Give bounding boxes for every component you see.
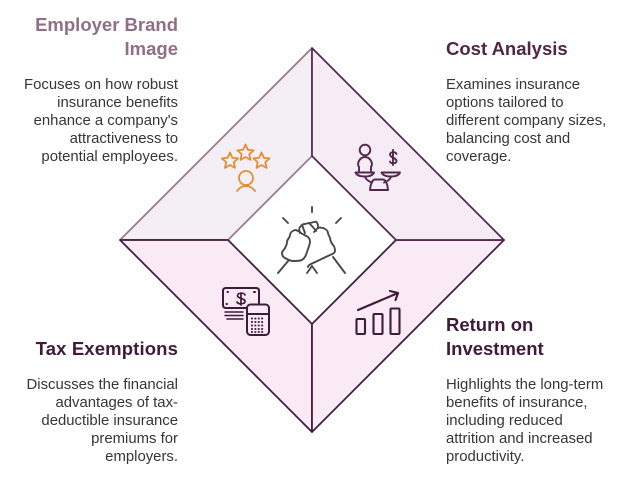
text: employer brand image: enhance a company's bbox=[34, 113, 178, 129]
text: tax exemptions bbox=[27, 377, 178, 465]
panel: tax exemptions quadrant bbox=[120, 240, 312, 432]
text: return on investment: Highlights the long-term bbox=[446, 377, 603, 393]
heading: cost analysis: Cost Analysis bbox=[446, 38, 568, 59]
text: cost analysis: options tailored to bbox=[446, 95, 564, 111]
icon: growth bars with arrow bbox=[356, 291, 400, 334]
text: return on investment: benefits of insurance, bbox=[446, 395, 588, 411]
panel: return on investment quadrant bbox=[312, 240, 504, 432]
text: employer brand image: attractiveness to bbox=[70, 131, 178, 147]
icon: scale with person and dollar bbox=[356, 145, 400, 190]
text: return on investment bbox=[446, 377, 603, 465]
heading: return on investment: Return on bbox=[446, 314, 533, 335]
text: tax exemptions: Discusses the financial bbox=[27, 377, 178, 393]
text: employer brand image: potential employees. bbox=[41, 149, 178, 165]
heading: return on investment: Investment bbox=[446, 338, 544, 359]
text: employer brand image: insurance benefits bbox=[57, 95, 178, 111]
heading: return on investment bbox=[446, 314, 544, 359]
center diamond bbox=[228, 156, 396, 324]
text: cost analysis: balancing cost and bbox=[446, 131, 570, 147]
text: tax exemptions: deductible insurance bbox=[41, 413, 178, 429]
heading: tax exemptions: Tax Exemptions bbox=[36, 338, 178, 359]
icon: money and calculator bbox=[223, 288, 269, 335]
icon: clasped hands bbox=[278, 207, 345, 273]
text: cost analysis: coverage. bbox=[446, 149, 511, 165]
text: cost analysis bbox=[446, 77, 606, 165]
heading: employer brand image bbox=[35, 14, 178, 59]
text: cost analysis: different company sizes, bbox=[446, 113, 606, 129]
text: employer brand image: Focuses on how robust bbox=[24, 77, 178, 93]
icon: stars and person bbox=[222, 144, 270, 191]
text: employer brand image bbox=[24, 77, 178, 165]
text: tax exemptions: advantages of tax- bbox=[55, 395, 178, 411]
text: tax exemptions: premiums for bbox=[91, 431, 178, 447]
panel: cost analysis quadrant bbox=[312, 48, 504, 240]
text: return on investment: including reduced bbox=[446, 413, 563, 429]
text: cost analysis: Examines insurance bbox=[446, 77, 580, 93]
text: tax exemptions: employers. bbox=[105, 449, 178, 465]
text: return on investment: attrition and increased bbox=[446, 431, 593, 447]
panel: employer brand image quadrant bbox=[120, 48, 312, 240]
text: return on investment: productivity. bbox=[446, 449, 524, 465]
heading: employer brand image: Image bbox=[125, 38, 178, 59]
heading: employer brand image: Employer Brand bbox=[35, 14, 178, 35]
